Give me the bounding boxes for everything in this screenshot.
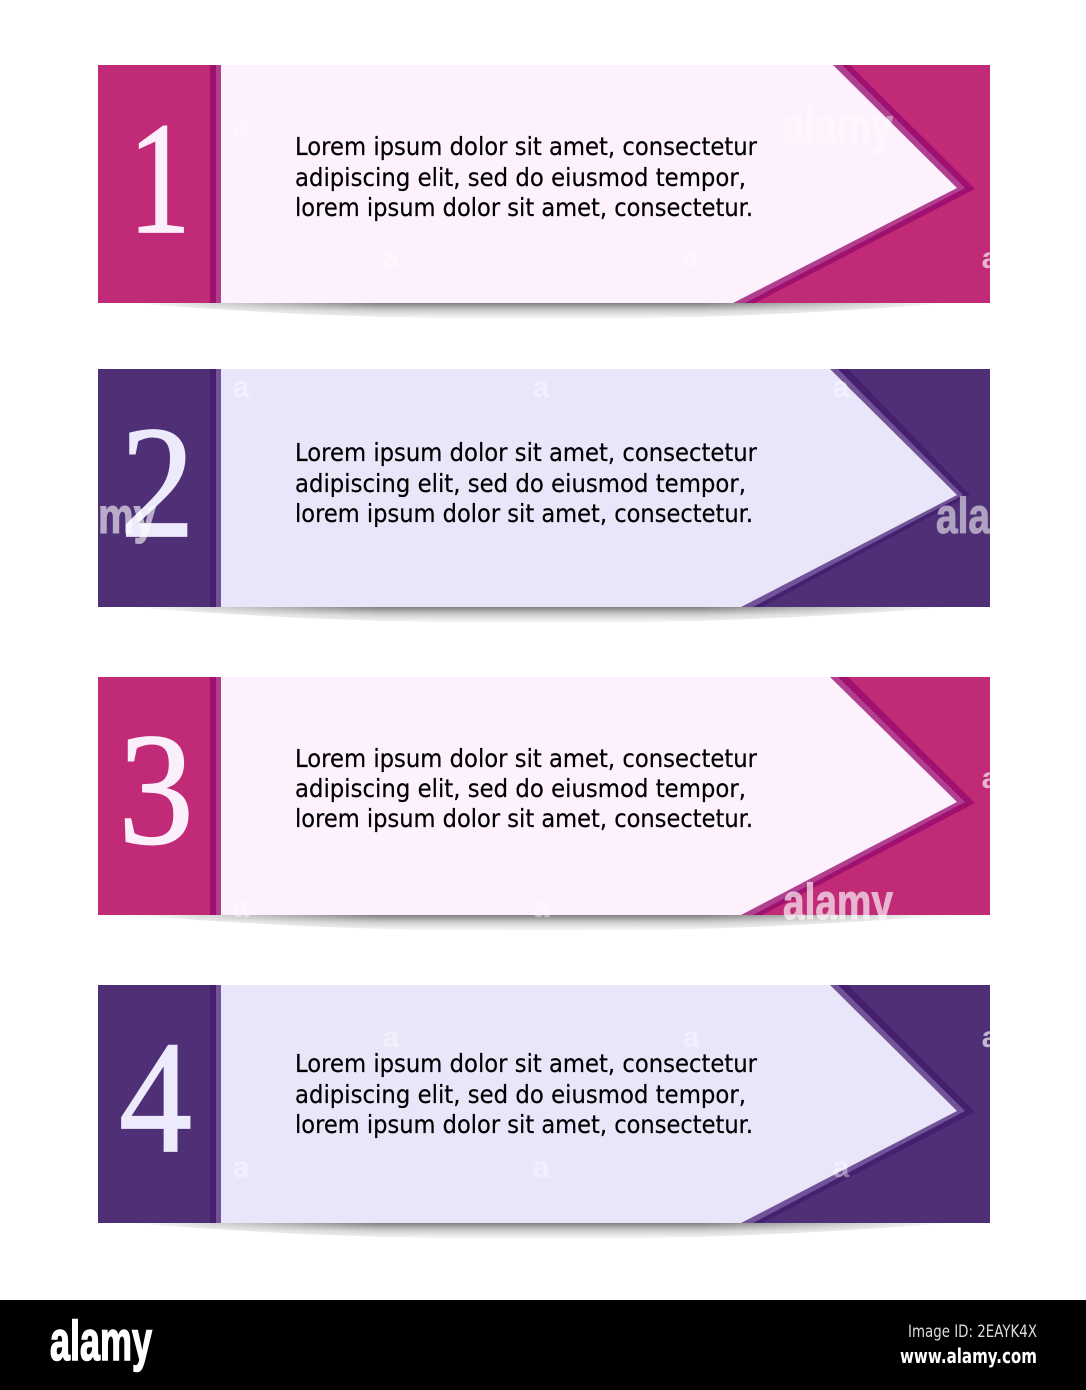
number 2: 2 bbox=[120, 394, 195, 571]
watermarks: a bbox=[982, 1021, 999, 1054]
footer bar bbox=[0, 1300, 1086, 1390]
watermark bbox=[233, 98, 999, 275]
watermarks: a bbox=[233, 1151, 250, 1184]
arrow dark edge bbox=[210, 369, 970, 607]
watermark: a bbox=[383, 241, 400, 274]
watermark: alamy bbox=[783, 874, 893, 930]
arrow mid edge bbox=[216, 369, 963, 607]
text block: Lorem ipsum dolor sit amet, consectetur bbox=[295, 744, 758, 773]
background band bbox=[98, 677, 990, 915]
text block: adipiscing elit, sed do eiusmod tempor, bbox=[295, 774, 746, 803]
watermarks: a bbox=[683, 1021, 700, 1054]
arrow dark edge bbox=[210, 677, 975, 915]
watermarks: a bbox=[233, 371, 250, 404]
watermarks: a bbox=[833, 371, 850, 404]
watermark: a bbox=[982, 762, 999, 795]
watermarks: my bbox=[98, 488, 156, 544]
arrow face bbox=[221, 369, 957, 607]
arrow face bbox=[221, 985, 957, 1223]
watermarks: ala bbox=[936, 488, 991, 544]
arrow dark edge bbox=[210, 985, 975, 1223]
panel: banner 1 bbox=[98, 65, 999, 323]
watermark bbox=[233, 762, 999, 930]
arrow face bbox=[221, 677, 957, 915]
watermarks: a bbox=[383, 1021, 400, 1054]
watermark: a bbox=[233, 891, 250, 924]
watermark: a bbox=[982, 242, 999, 275]
panel: banner 3 bbox=[98, 677, 999, 935]
watermark: a bbox=[683, 241, 700, 274]
text block bbox=[295, 438, 758, 528]
text block: Lorem ipsum dolor sit amet, consectetur bbox=[295, 438, 758, 467]
watermarks bbox=[233, 1021, 999, 1184]
text block bbox=[295, 132, 758, 222]
background band bbox=[98, 65, 990, 303]
text block bbox=[295, 1049, 758, 1139]
shadow bbox=[130, 915, 950, 935]
number 3: 3 bbox=[118, 701, 194, 878]
text block: lorem ipsum dolor sit amet, consectetur. bbox=[295, 193, 753, 222]
text block: Lorem ipsum dolor sit amet, consectetur bbox=[295, 132, 758, 161]
text block bbox=[295, 744, 758, 833]
background band bbox=[98, 985, 990, 1223]
watermarks bbox=[98, 371, 991, 544]
background band bbox=[98, 369, 990, 607]
watermark: a bbox=[233, 111, 250, 144]
panel: banner 2 bbox=[98, 369, 991, 627]
text block: Lorem ipsum dolor sit amet, consectetur bbox=[295, 1049, 758, 1078]
watermark: a bbox=[533, 891, 550, 924]
text block: adipiscing elit, sed do eiusmod tempor, bbox=[295, 1080, 746, 1109]
shadow bbox=[130, 303, 950, 323]
image id: Image ID: 2EAYK4X bbox=[908, 1322, 1037, 1342]
arrow mid edge bbox=[216, 677, 965, 915]
shadow bbox=[130, 1223, 950, 1243]
arrow mid edge bbox=[216, 65, 965, 303]
watermarks: a bbox=[833, 1151, 850, 1184]
number 4: 4 bbox=[119, 1010, 192, 1187]
text block: adipiscing elit, sed do eiusmod tempor, bbox=[295, 163, 746, 192]
logo: alamy bbox=[50, 1309, 152, 1372]
arrow mid edge bbox=[216, 985, 965, 1223]
watermarks: a bbox=[533, 371, 550, 404]
watermark: alamy bbox=[783, 98, 893, 154]
text block: lorem ipsum dolor sit amet, consectetur. bbox=[295, 1110, 753, 1139]
arrow face bbox=[221, 65, 957, 303]
text block: lorem ipsum dolor sit amet, consectetur. bbox=[295, 804, 753, 833]
text block: lorem ipsum dolor sit amet, consectetur. bbox=[295, 499, 753, 528]
website: www.alamy.com bbox=[900, 1344, 1037, 1368]
watermarks: a bbox=[533, 1151, 550, 1184]
shadow bbox=[130, 607, 950, 627]
arrow dark edge bbox=[210, 65, 975, 303]
panel: banner 4 bbox=[98, 985, 999, 1243]
text block: adipiscing elit, sed do eiusmod tempor, bbox=[295, 469, 746, 498]
number 1: 1 bbox=[128, 90, 191, 268]
